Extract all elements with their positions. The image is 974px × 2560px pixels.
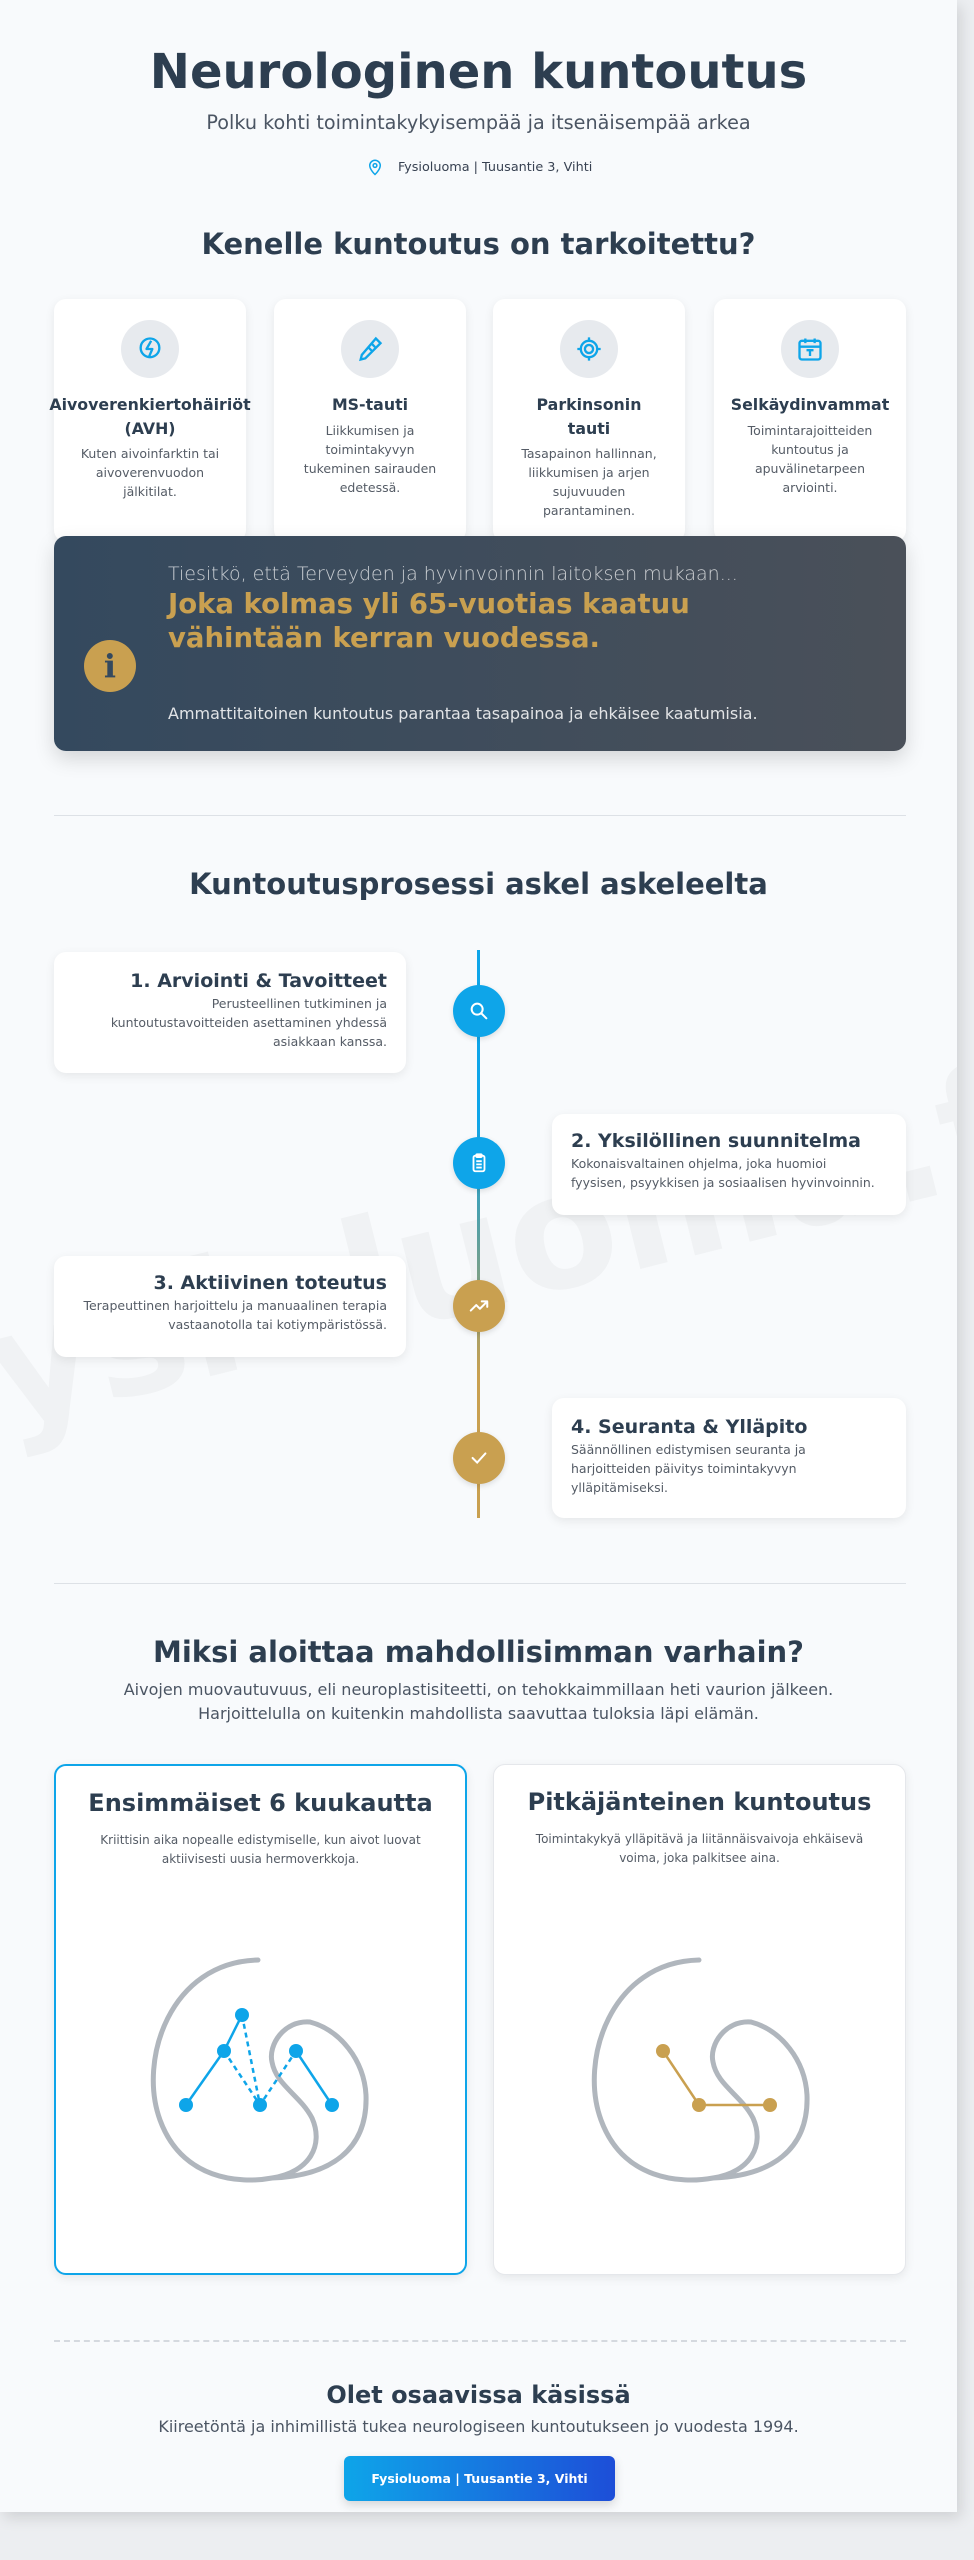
brain graphic: active network xyxy=(150,1958,369,2182)
card: AVH xyxy=(54,299,246,542)
card: Parkinson: Parkinsonin xyxy=(537,395,641,414)
text: neuroplasticity xyxy=(124,1680,833,1723)
step 2 xyxy=(552,1114,906,1215)
icon: check xyxy=(453,1432,505,1484)
card: Parkinson xyxy=(493,299,685,542)
timeline xyxy=(54,950,906,1522)
card: AVH: (AVH) xyxy=(124,419,176,438)
step 3: Terapeuttinen harjoittelu ja manuaalinen terapia vastaanotolla tai kotiympäristössä. xyxy=(83,1298,387,1332)
icon: info: i xyxy=(104,647,116,685)
brain graphic: maintained network xyxy=(592,1958,810,2182)
card: Parkinson: tauti xyxy=(568,419,610,438)
icon: location pin xyxy=(369,160,381,176)
card: MS: Liikkumisen ja toimintakyvyn tukeminen sairauden edetessä. xyxy=(304,423,436,495)
card: AVH: Aivoverenkiertohäiriöt xyxy=(49,395,251,414)
location line: Fysioluoma | Tuusantie 3, Vihti xyxy=(398,160,592,174)
card: selkäydinvammat: Selkäydinvammat xyxy=(731,395,889,414)
step 4: Säännöllinen edistymisen seuranta ja harjoitteiden päivitys toimintakyvyn ylläpitämiseksi. xyxy=(571,1442,806,1495)
text: footer: Kiireetöntä ja inhimillistä tukea neurologiseen kuntoutukseen jo vuodesta 1994. xyxy=(158,2417,799,2436)
card: MS: MS-tauti xyxy=(332,395,408,414)
step 3 xyxy=(54,1256,406,1357)
panel: first 6 months xyxy=(54,1764,467,2275)
step 1: Perusteellinen tutkiminen ja kuntoutustavoitteiden asettaminen yhdessä asiakkaan kanssa. xyxy=(111,996,387,1049)
timeline line xyxy=(477,950,480,1518)
step 4 xyxy=(552,1398,906,1518)
icon: clipboard xyxy=(453,1137,505,1189)
icon: trend xyxy=(453,1280,505,1332)
button: contact: Fysioluoma | Tuusantie 3, Vihti xyxy=(371,2471,588,2486)
card: selkäydinvammat xyxy=(714,299,906,542)
step 2: Kokonaisvaltainen ohjelma, joka huomioi xyxy=(571,1156,826,1171)
heading: why early: Miksi aloittaa mahdollisimman varhain? xyxy=(153,1635,804,1669)
heading: footer: Olet osaavissa käsissä xyxy=(326,2381,631,2409)
callout: fall statistics: vähintään kerran vuodessa. xyxy=(168,622,600,654)
callout: fall statistics xyxy=(54,536,906,751)
text: neuroplasticity: Harjoittelulla on kuitenkin mahdollista saavuttaa tuloksia läpi elämän. xyxy=(198,1704,759,1723)
heading: process: Kuntoutusprosessi askel askeleelta xyxy=(189,867,768,901)
callout: fall statistics: Tiesitkö, että Terveyden ja hyvinvoinnin laitoksen mukaan... xyxy=(168,563,738,585)
card: AVH: Kuten aivoinfarktin tai aivoverenvuodon jälkitilat. xyxy=(81,446,219,499)
text: neuroplasticity: Aivojen muovautuvuus, eli neuroplastisiteetti, on tehokkaimmillaan heti vaurion jälkeen. xyxy=(124,1680,833,1699)
icon: search xyxy=(453,985,505,1037)
step 1: 1. Arviointi & Tavoitteet xyxy=(130,970,387,992)
icon: info xyxy=(84,640,136,692)
step 2: fyysisen, psyykkisen ja sosiaalisen hyvinvoinnin. xyxy=(571,1175,875,1190)
step 2: 2. Yksilöllinen suunnitelma xyxy=(571,1130,861,1152)
step 4: 4. Seuranta & Ylläpito xyxy=(571,1416,807,1438)
callout: fall statistics: Ammattitaitoinen kuntoutus parantaa tasapainoa ja ehkäisee kaatumisia. xyxy=(168,704,758,723)
step 1 xyxy=(54,952,406,1073)
card: Parkinson: Tasapainon hallinnan, liikkumisen ja arjen sujuvuuden parantaminen. xyxy=(521,446,657,518)
title: Neurologinen kuntoutus xyxy=(150,44,807,100)
card: selkäydinvammat: Toimintarajoitteiden kuntoutus ja apuvälinetarpeen arviointi. xyxy=(748,423,872,495)
heading: kenelle: Kenelle kuntoutus on tarkoitettu? xyxy=(202,227,755,261)
subtitle: Polku kohti toimintakykyisempää ja itsenäisempää arkea xyxy=(206,111,751,134)
step 3: 3. Aktiivinen toteutus xyxy=(153,1272,387,1294)
panel: first 6 months: Kriittisin aika nopealle edistymiselle, kun aivot luovat aktiivisesti uusia hermoverkkoja. xyxy=(100,1833,421,1866)
panel: long term: Toimintakykyä ylläpitävä ja liitännäisvaivoja ehkäisevä voima, joka palkitsee aina. xyxy=(536,1832,863,1865)
callout: fall statistics: Joka kolmas yli 65-vuotias kaatuu xyxy=(168,588,690,620)
card: MS xyxy=(274,299,466,542)
panel: first 6 months: Ensimmäiset 6 kuukautta xyxy=(88,1789,433,1817)
panel: target group cards xyxy=(49,315,906,540)
button: contact xyxy=(344,2456,615,2501)
panel: long term: Pitkäjänteinen kuntoutus xyxy=(528,1788,871,1816)
panel: long term xyxy=(493,1764,906,2275)
